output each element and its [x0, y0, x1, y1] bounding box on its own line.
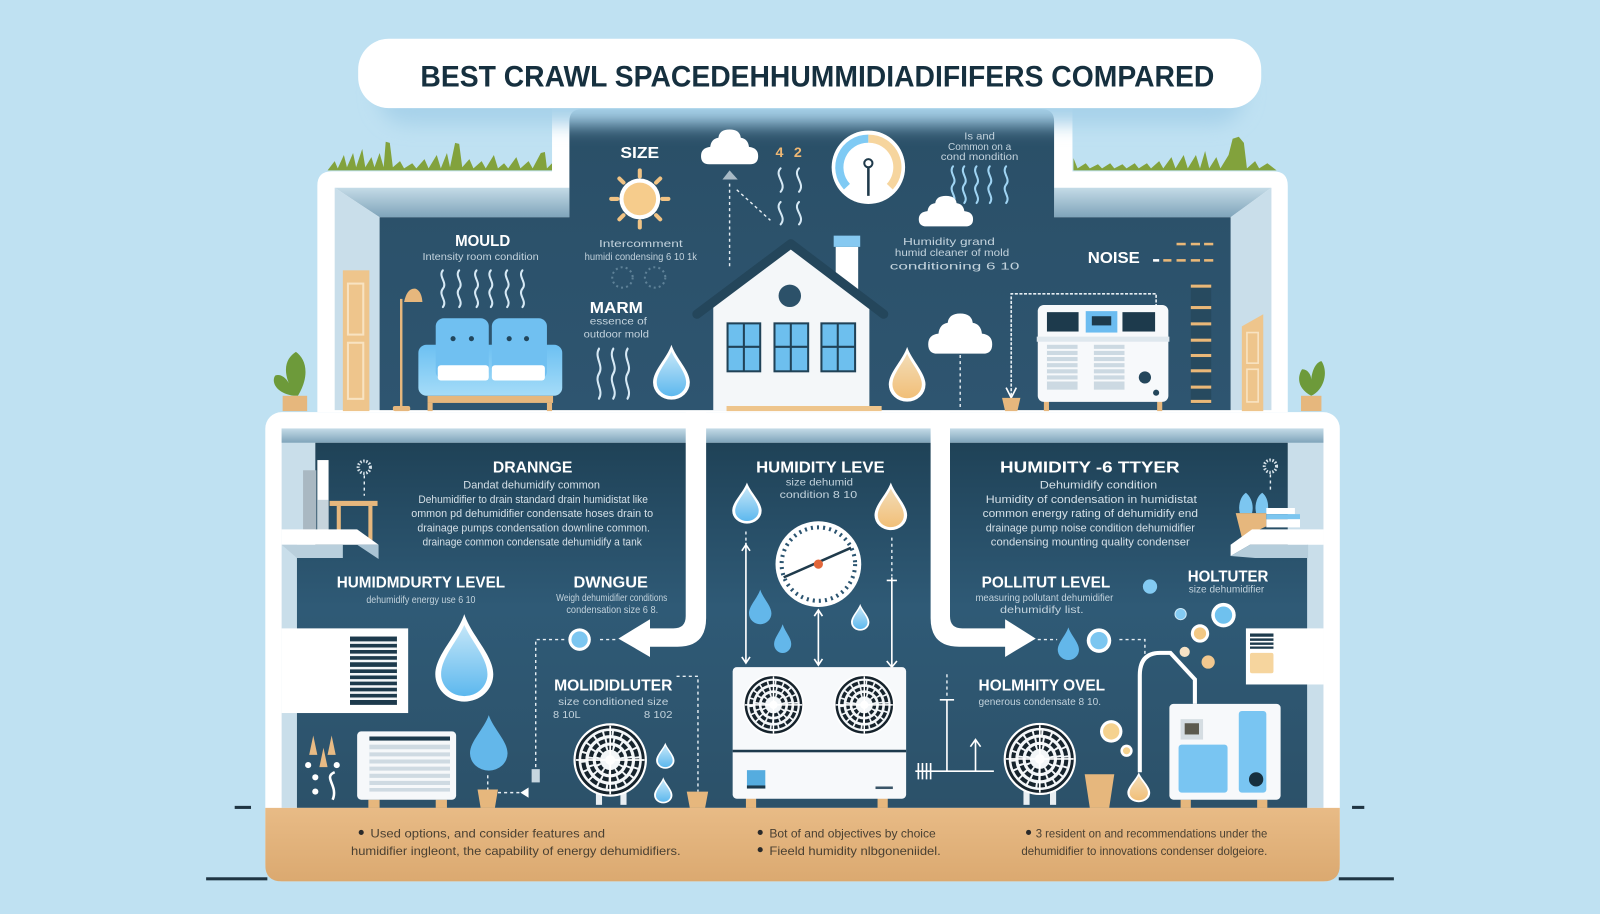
gauge top: [832, 131, 905, 204]
top room wall and ceiling right: [1054, 188, 1271, 410]
text: right note: conditioning 6 10: [890, 261, 1020, 272]
heading: mould: [422, 233, 539, 263]
text: top right note: [941, 132, 1018, 163]
title pill: [358, 39, 1261, 124]
heading: pollitut level: [976, 575, 1114, 616]
text: left note: Intercomment: [599, 239, 683, 250]
fan left: [573, 723, 647, 805]
footer text right: 3 resident on and recommendations under the: [1036, 827, 1267, 840]
text: top right note: cond mondition: [941, 152, 1018, 163]
fan right: [1004, 723, 1076, 805]
heading: drainage: [411, 459, 653, 549]
small spray icon right: [1264, 460, 1277, 492]
footer text middle: Bot of and objectives by choice: [769, 827, 936, 840]
heading: humidmdurty level: [337, 575, 505, 606]
footer text right: dehumidifier to innovations condenser dolgeiore.: [1021, 845, 1267, 858]
pot right: [1085, 774, 1114, 808]
antenna lines: [915, 700, 994, 779]
title: BEST CRAWL SPACEDEHHUMMIDIADIFIFERS COMPARED: [420, 61, 1214, 94]
lower ceiling: [282, 428, 1323, 443]
lower room wall left: [282, 428, 315, 808]
small spray icon left: [358, 461, 370, 496]
drainage body text: Dehumidifier to drain standard drain humidistat like: [418, 494, 648, 506]
molidiluter subtitle: size conditioned size: [558, 697, 668, 708]
text: top right note: Common on a: [948, 142, 1012, 153]
heading: molidiluter: MOLIDIDLUTER: [554, 678, 672, 695]
drainage body text: [411, 480, 653, 549]
heading: dwngue: [556, 575, 667, 616]
heading: humidmdurty level: HUMIDMDURTY LEVEL: [337, 575, 505, 592]
number icons: 4: [776, 145, 784, 161]
lower building shell: [265, 412, 1340, 881]
number icons: 2: [794, 145, 802, 161]
humidity subtitle: dehumidify energy use 6 10: [366, 595, 476, 606]
humidity leve subtitle: [780, 478, 858, 501]
text: right note: Humidity grand: [903, 237, 995, 248]
humidity type body text: condensing mounting quality condenser: [991, 537, 1190, 549]
dwngue subtitle: [556, 593, 667, 616]
heading: noise: NOISE: [1088, 250, 1140, 267]
faint dotted marks: [612, 267, 665, 288]
drops around gauge: [732, 483, 907, 653]
drainage body text: Dandat dehumidify common: [463, 480, 600, 492]
dashed sensor line: [722, 170, 770, 267]
right shelf with pot and books: [1231, 493, 1323, 558]
pipe right with arrow: [931, 412, 1036, 657]
vertical arrows: [742, 531, 897, 667]
top room dark panel: [380, 109, 1231, 410]
text: right note: [890, 237, 1020, 272]
dehumidifier unit: [1169, 704, 1281, 808]
top room wall and ceiling left: [335, 188, 569, 410]
icon: drop orange: [889, 347, 926, 402]
text: left note: humidi condensing 6 10 1k: [585, 252, 697, 263]
drop near low ac: [470, 715, 508, 771]
holtuter subtitle: size dehumidifier: [1189, 585, 1265, 596]
molidiluter subtitle: [553, 697, 672, 721]
door right: [1242, 314, 1263, 411]
humidity leve subtitle: condition 8 10: [780, 490, 858, 501]
holmhity subtitle: generous condensate 8 10.: [979, 697, 1101, 708]
heading: molidiluter: [553, 678, 672, 721]
drainage body text: drainage pumps condensation downline common.: [417, 522, 650, 534]
footer text middle: [758, 827, 941, 858]
connector above ac unit: [1002, 294, 1156, 411]
heading: size: SIZE: [620, 145, 659, 162]
mould subtitle: Intensity room condition: [422, 252, 539, 263]
pollitut subtitle: dehumidify list.: [1000, 605, 1084, 616]
pollitut subtitle: [976, 593, 1114, 616]
node left and dashes: [532, 628, 618, 782]
text: right note: humid cleaner of mold: [895, 248, 1009, 259]
heading: holmhity ovel: HOLMHITY OVEL: [979, 678, 1105, 695]
text: top right note: Is and: [964, 132, 995, 143]
heading: mould: MOULD: [455, 233, 510, 250]
humidity type body text: drainage pump noise condition dehumidifier: [986, 522, 1195, 534]
floor lamp: [393, 289, 422, 411]
tube and orange drop: [1127, 653, 1195, 802]
drainage body text: ommon pd dehumidifier condensate hoses drain to: [411, 508, 653, 520]
dashed right of molidiluter: [677, 676, 698, 792]
humidity type body text: Humidity of condensation in humidistat: [986, 494, 1197, 506]
humidity type body text: Dehumidify condition: [1040, 480, 1157, 492]
low ac unit: [357, 731, 456, 808]
sofa: [418, 318, 562, 411]
heading: humidity leve: [756, 459, 885, 501]
heading: pollitut level: POLLITUT LEVEL: [982, 575, 1110, 592]
pot with arrow left: [478, 775, 529, 808]
noise scale dashes: [1153, 243, 1213, 262]
lower dark panel: [297, 443, 1307, 808]
plant right: [1299, 361, 1325, 411]
heading: holtuter: [1188, 568, 1268, 596]
grass right: [1073, 137, 1277, 170]
left shelf with table and books: [282, 460, 379, 559]
right vent block: [1246, 628, 1323, 684]
footer text left: [351, 827, 681, 858]
ac unit top: [1037, 305, 1169, 411]
heading: dwngue: DWNGUE: [573, 575, 648, 592]
big water drop: [435, 614, 493, 702]
door left: [343, 270, 369, 411]
ladder scale: [1191, 284, 1211, 404]
icon: cloud mid: [928, 313, 992, 354]
text: left note: [585, 239, 697, 263]
lower room wall right: [1288, 428, 1323, 808]
top building shell: [317, 109, 1288, 412]
pollitut subtitle: measuring pollutant dehumidifier: [976, 593, 1114, 604]
drainage body text: drainage common condensate dehumidify a tank: [422, 537, 642, 549]
footer text left: humidifier ingleont, the capability of energy dehumidifiers.: [351, 845, 681, 858]
pot right of fan: [687, 792, 708, 808]
icon: cloud top: [701, 130, 758, 164]
icon: sun: [611, 170, 668, 227]
heading: humidity leve: HUMIDITY LEVE: [756, 459, 885, 476]
bubbles: [1100, 579, 1236, 757]
plant left: [274, 352, 307, 411]
dwngue subtitle: Weigh dehumidifier conditions: [556, 593, 667, 604]
central gauge: [776, 521, 861, 607]
house: [697, 236, 884, 411]
soil band: [265, 808, 1340, 881]
dwngue subtitle: condensation size 6 8.: [566, 605, 658, 616]
molidiluter subtitle: 8 10L: [553, 710, 581, 721]
humidity type body text: common energy rating of dehumidify end: [983, 508, 1198, 520]
icon: small cloud: [919, 196, 973, 226]
pipe left with arrow: [618, 412, 706, 657]
humidity leve subtitle: size dehumid: [786, 478, 853, 489]
grass left: [328, 142, 552, 170]
heading: drainage: DRANNGE: [493, 459, 572, 476]
dashed above antenna: [946, 674, 948, 697]
left vent block: [282, 628, 408, 713]
molidiluter subtitle: 8 102: [644, 710, 672, 721]
small drops near fan: [654, 743, 674, 803]
waves top right: [952, 166, 1008, 203]
small orange spikes and dots: [305, 735, 340, 800]
number icons: [776, 145, 802, 224]
footer text middle: Fieeld humidity nlbgoneniidel.: [769, 845, 941, 858]
central outdoor unit: [733, 667, 906, 808]
footer text right: [1021, 827, 1267, 858]
right connector: [1038, 627, 1145, 660]
icon: drop blue: [653, 345, 690, 400]
dashed line below cloud: [959, 355, 961, 410]
humidity type body text: [983, 480, 1198, 549]
marm subtitle 2: outdoor mold: [584, 330, 649, 341]
heading: marm: [590, 300, 647, 327]
ground lines: [206, 806, 1394, 880]
heading: marm: MARM: [590, 300, 643, 317]
heading: humidity -6 ttyer: HUMIDITY -6 TTYER: [1000, 459, 1180, 476]
heading: holmhity ovel: [979, 678, 1105, 708]
heading: humidity -6 ttyer: [983, 459, 1198, 549]
marm subtitle: essence of: [590, 316, 647, 327]
heading: holtuter: HOLTUTER: [1188, 568, 1268, 585]
waves near marm: [598, 349, 629, 398]
wavy lines above sofa: [441, 270, 524, 307]
footer text left: Used options, and consider features and: [370, 827, 605, 840]
